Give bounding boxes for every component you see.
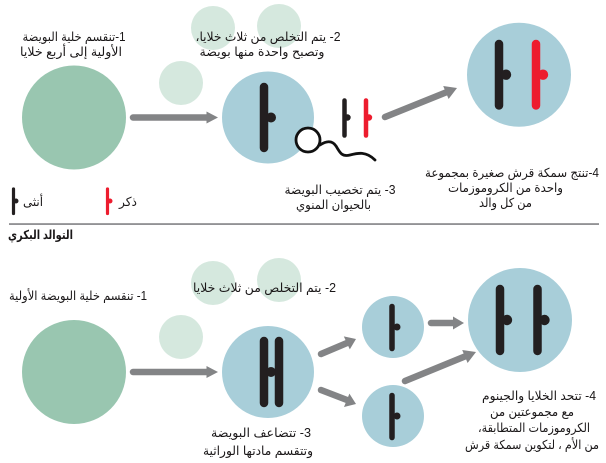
text: step 3: 3- تتضاعف البويضة xyxy=(211,426,311,441)
text: step 4 xyxy=(425,166,599,211)
text: step 1 xyxy=(20,30,126,60)
text: step 3: وتتقسم مادتها الوراثية xyxy=(203,444,313,459)
text: step 4: مع مجموعتين من xyxy=(490,405,574,420)
text: step 4: من كل والد xyxy=(479,196,532,211)
arrow: division to egg xyxy=(133,366,218,378)
text: step 2: 2- يتم التخلص من ثلاث خلايا xyxy=(193,281,336,296)
text: step 1: 1- تنقسم خلية البويضة الأولية xyxy=(9,288,147,304)
icon: embryo with two chromosome sets xyxy=(467,23,571,127)
text: step 2: 2- يتم التخلص من ثلاث خلايا، xyxy=(196,30,341,45)
icon: lower cell xyxy=(362,385,424,447)
arrow: to upper cell xyxy=(321,336,356,354)
text: step 4: واحدة من الكروموزمات xyxy=(448,181,563,196)
icon: primary egg cell xyxy=(22,66,126,170)
text: step 3: بالحيوان المنوي xyxy=(296,198,371,213)
text: step 4: 4- تتحد الخلايا والجينوم xyxy=(482,389,596,404)
panel: sexual reproduction xyxy=(20,4,599,213)
text: step 3 xyxy=(203,426,313,459)
icon: discarded cells xyxy=(159,258,301,359)
icon: embryo with matching chromosomes xyxy=(468,268,572,372)
icon: black and red chromosomes xyxy=(344,100,372,136)
icon: discarded cells xyxy=(159,4,301,105)
heading: parthenogenesis: التوالد البكري xyxy=(8,228,73,242)
text: step 3: 3- يتم تخصيب البويضة xyxy=(284,183,396,198)
text: step 4 xyxy=(465,389,599,453)
arrow: upper cell to embryo xyxy=(431,316,464,330)
legend item: male: ذكر xyxy=(118,195,137,210)
text: step 4: 4-تنتج سمكة قرش صغيرة بمجموعة xyxy=(425,166,599,181)
text: step 4: الكروموزمات المتطابقة، xyxy=(478,421,590,436)
icon: upper cell xyxy=(362,296,424,358)
legend item: female: أنثى xyxy=(23,193,43,209)
arrow: fertilisation to embryo xyxy=(385,86,457,117)
text: step 1: 1-تنقسم خلية البويضة xyxy=(22,30,126,45)
icon: egg with doubled chromosome xyxy=(222,326,314,418)
text: step 2 xyxy=(196,30,341,60)
panel: parthenogenesis xyxy=(9,258,599,459)
icon: primary egg cell xyxy=(22,320,126,424)
arrow: lower cell to embryo xyxy=(405,350,476,381)
text: step 1: الأولية إلى أربع خلايا xyxy=(20,43,122,60)
text: step 2: وتصبح واحدة منها بويضة xyxy=(200,45,324,60)
arrow: division to egg xyxy=(133,112,218,124)
legend xyxy=(14,189,137,214)
icon: egg with chromosome xyxy=(222,72,314,164)
text: step 3 xyxy=(284,183,396,213)
icon: sperm xyxy=(296,128,375,160)
arrow: to lower cell xyxy=(321,390,356,407)
